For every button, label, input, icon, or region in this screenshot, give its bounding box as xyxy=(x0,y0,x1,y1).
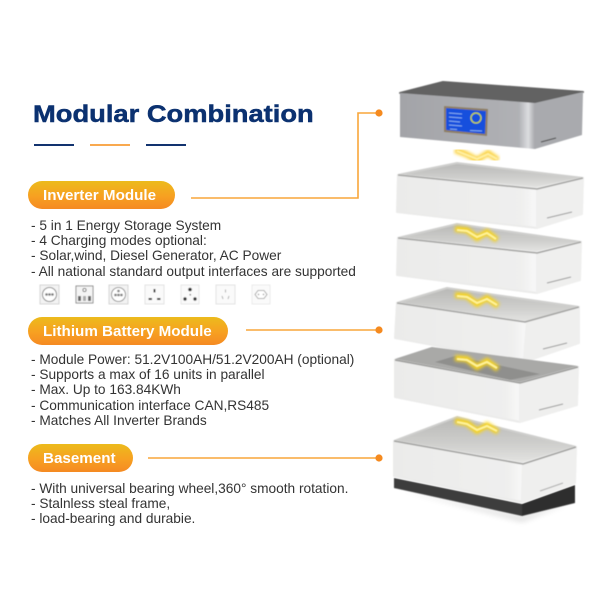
battery module 2 xyxy=(397,224,581,293)
inverter text block: - All national standard output interfaces are supported xyxy=(31,264,356,279)
icon: socket 1 xyxy=(40,285,59,304)
pill: basement: Basement xyxy=(43,450,116,467)
icon: socket 7 xyxy=(252,285,270,304)
battery text block xyxy=(31,352,354,428)
basement text block: - load-bearing and durabie. xyxy=(31,511,195,526)
battery base unit xyxy=(394,417,576,522)
bolt above battery 1 xyxy=(455,150,498,160)
pill: inverter module xyxy=(28,181,175,209)
basement text block xyxy=(31,481,348,526)
battery text block: - Max. Up to 163.84KWh xyxy=(31,382,181,397)
title: Modular Combination xyxy=(33,101,314,128)
inverter screen xyxy=(444,106,488,136)
connector: inverter xyxy=(191,109,383,198)
basement text block: - With universal bearing wheel,360° smooth rotation. xyxy=(31,481,348,496)
inverter text block: - 5 in 1 Energy Storage System xyxy=(31,218,221,233)
icon: socket 2 xyxy=(76,286,93,303)
bolt xyxy=(455,229,497,240)
battery module 3 xyxy=(395,288,579,362)
icon: socket 4 xyxy=(145,285,164,304)
battery text block: - Module Power: 51.2V100AH/51.2V200AH (optional) xyxy=(31,352,354,367)
title accent bars xyxy=(34,144,186,146)
battery module 1 xyxy=(397,163,583,228)
pill: basement xyxy=(28,444,133,472)
battery text block: - Matches All Inverter Brands xyxy=(31,413,207,428)
inverter unit xyxy=(400,82,583,149)
inverter text block xyxy=(31,218,356,279)
battery module 4 xyxy=(395,348,578,422)
inverter text block: - 4 Charging modes optional: xyxy=(31,233,207,248)
pill: lithium battery module: Lithium Battery Module xyxy=(43,323,212,340)
connector: battery xyxy=(246,326,383,334)
icon: socket 5 xyxy=(181,285,199,304)
pill: lithium battery module xyxy=(28,317,228,345)
inverter text block: - Solar,wind, Diesel Generator, AC Power xyxy=(31,248,281,263)
icon: socket 6 xyxy=(216,285,235,304)
battery text block: - Communication interface CAN,RS485 xyxy=(31,398,269,413)
pill: inverter module: Inverter Module xyxy=(43,187,156,204)
bolt xyxy=(455,421,498,432)
socket icons row xyxy=(40,285,270,304)
battery text block: - Supports a max of 16 units in parallel xyxy=(31,367,265,382)
icon: socket 3 xyxy=(109,285,128,304)
basement text block: - Stalnless steal frame, xyxy=(31,496,170,511)
bolt xyxy=(455,295,498,306)
connector: basement xyxy=(148,454,383,462)
bolt xyxy=(455,358,498,369)
